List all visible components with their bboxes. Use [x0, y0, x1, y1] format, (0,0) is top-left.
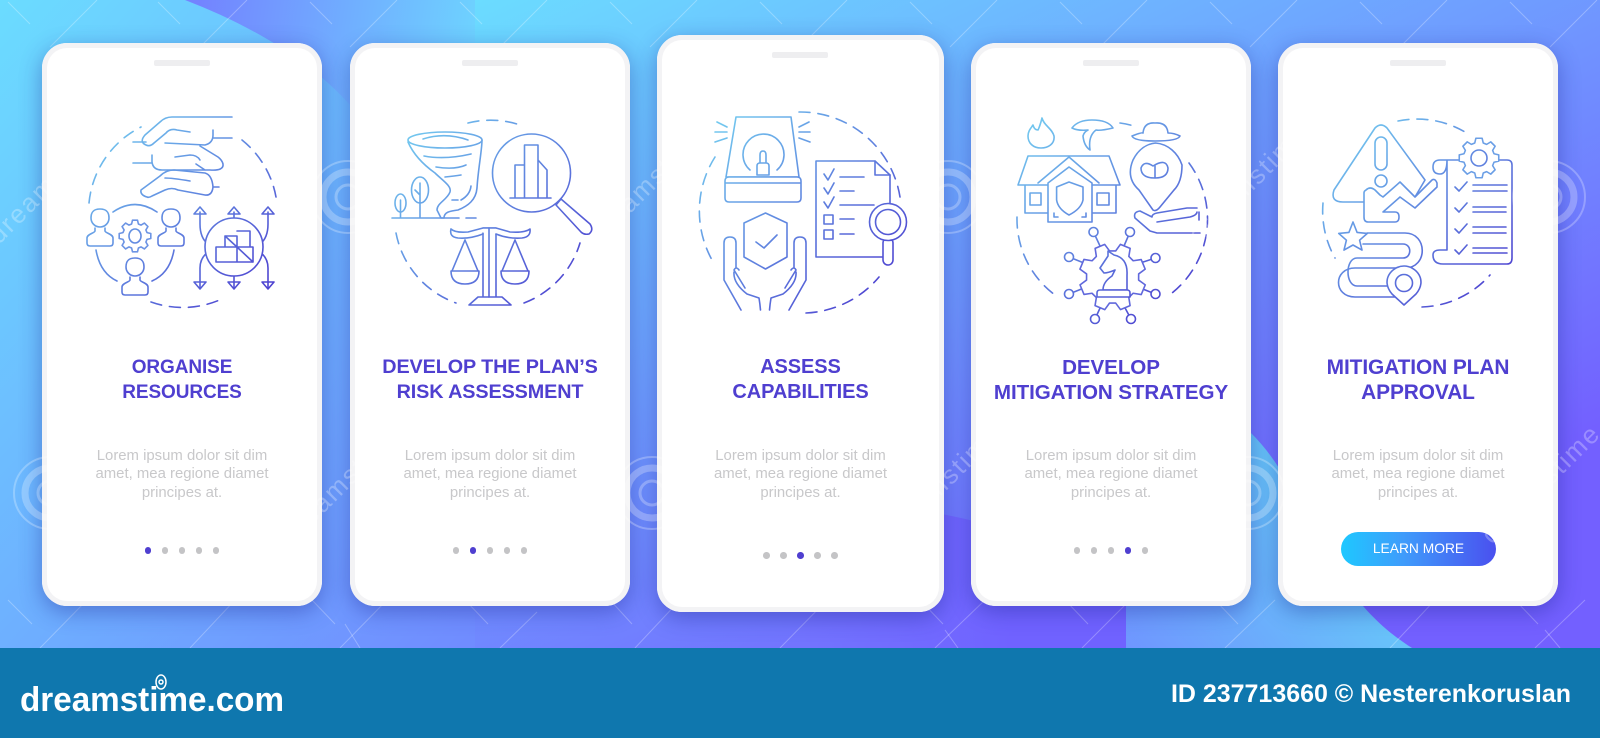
title: ASSESS [760, 356, 841, 378]
footer logo text: dreamstime.com [20, 681, 284, 719]
phone card 5: mitigation plan approval [1278, 43, 1558, 606]
title [994, 356, 1228, 404]
icon: siren, checklist and shield in hands [698, 111, 908, 314]
title [1327, 356, 1509, 404]
description [1024, 448, 1198, 501]
footer spiral mark [156, 675, 166, 689]
description: Lorem ipsum dolor sit dim [405, 448, 575, 464]
pagination dots [145, 547, 219, 554]
description [1332, 448, 1504, 501]
description [404, 448, 576, 501]
footer image id and author: ID 237713660 © Nesterenkoruslan [1171, 680, 1571, 708]
title: APPROVAL [1361, 381, 1475, 404]
description: Lorem ipsum dolor sit dim [1333, 448, 1503, 464]
description: amet, mea regione diamet [404, 466, 576, 482]
icon: tornado, magnifier and scales [391, 119, 593, 306]
icon: house, seedling in hand and chess strategy gear [1016, 117, 1208, 324]
watermark spirals and diagonal marks: dreamstime [875, 418, 1006, 549]
title [122, 357, 242, 403]
description: principes at. [450, 485, 530, 501]
learn more button: LEARN MORE [1373, 541, 1464, 556]
learn more button [1341, 532, 1496, 566]
description: principes at. [1071, 485, 1151, 501]
description: principes at. [760, 485, 841, 501]
description: amet, mea regione diamet [714, 466, 887, 482]
title [382, 356, 598, 403]
description: amet, mea regione diamet [1332, 466, 1504, 482]
description: amet, mea regione diamet [96, 466, 268, 482]
description: Lorem ipsum dolor sit dim [1026, 448, 1196, 464]
title: RESOURCES [122, 382, 242, 403]
description: Lorem ipsum dolor sit dim [715, 448, 886, 464]
description [714, 448, 887, 501]
description [96, 448, 268, 501]
icon: organise resources [86, 116, 277, 308]
phone card 4: develop mitigation strategy [971, 43, 1251, 606]
description: principes at. [1378, 485, 1458, 501]
watermark spirals and diagonal marks: dreamstime [275, 418, 406, 549]
description: Lorem ipsum dolor sit dim [97, 448, 267, 464]
pagination dots [453, 547, 527, 554]
title: DEVELOP THE PLAN’S [382, 356, 598, 378]
description: amet, mea regione diamet [1024, 466, 1198, 482]
title: CAPABILITIES [732, 381, 869, 403]
title: RISK ASSESSMENT [397, 381, 583, 403]
phone card 2: risk assessment [350, 43, 630, 606]
title [732, 356, 869, 403]
footer bar [20, 674, 1571, 719]
title: ORGANISE [132, 357, 232, 378]
watermark spirals and diagonal marks: dreamstime [1182, 118, 1313, 249]
description: principes at. [142, 485, 222, 501]
phone card 3: assess capabilities [657, 35, 944, 612]
watermark spirals and diagonal marks: dreamstime [582, 118, 713, 249]
pagination dots [1074, 547, 1148, 554]
title: MITIGATION PLAN [1327, 356, 1509, 379]
phone card 1: organise resources [42, 43, 322, 606]
icon: warning, winding road and approved scroll [1322, 118, 1513, 308]
title: MITIGATION STRATEGY [994, 381, 1228, 404]
pagination dots [763, 552, 838, 559]
title: DEVELOP [1062, 356, 1160, 379]
